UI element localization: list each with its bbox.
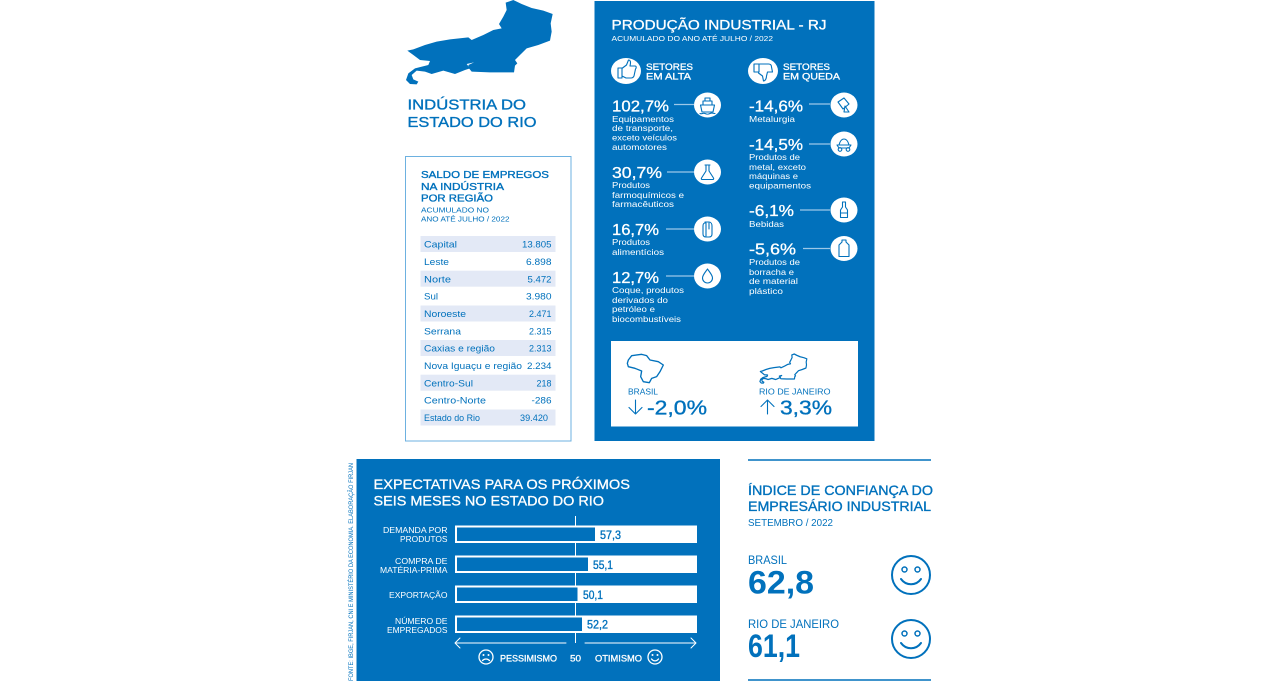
main title: ESTADO DO RIO bbox=[408, 114, 536, 131]
Brazil index: BRASIL bbox=[748, 555, 788, 567]
item: beverages bbox=[749, 198, 858, 229]
bar: raw material: COMPRA DE bbox=[395, 556, 448, 566]
panel: industrial production RJ bbox=[594, 1, 874, 441]
Rio figure: RIO DE JANEIRO bbox=[759, 386, 831, 396]
bar: exports: 50,1 bbox=[583, 588, 603, 602]
panel heading bbox=[421, 169, 549, 224]
item: pharmaceuticals: farmacêuticos bbox=[612, 199, 675, 209]
Rio index: 61,1 bbox=[748, 628, 800, 664]
table: balance by region: Serrana bbox=[424, 326, 462, 338]
item: transport equipment: automotores bbox=[612, 142, 668, 152]
panel heading: SALDO DE EMPREGOS bbox=[421, 169, 549, 181]
Rio index bbox=[748, 619, 839, 664]
item: rubber and plastic: plástico bbox=[749, 286, 783, 296]
table: balance by region: 13.805 bbox=[522, 240, 552, 250]
item: coke and petroleum: 12,7% bbox=[612, 270, 659, 287]
panel heading: SEIS MESES NO ESTADO DO RIO bbox=[374, 492, 604, 508]
item: pharmaceuticals: farmoquímicos e bbox=[612, 190, 684, 200]
label: sectors down: SETORES bbox=[783, 62, 830, 72]
panel heading: ACUMULADO NO bbox=[421, 206, 489, 214]
item: food products bbox=[612, 216, 721, 257]
Rio figure bbox=[759, 386, 832, 420]
label: sectors up: SETORES bbox=[646, 62, 693, 72]
main title bbox=[408, 96, 536, 131]
Rio index: RIO DE JANEIRO bbox=[748, 619, 839, 631]
table: balance by region: Leste bbox=[424, 257, 449, 268]
icon: smiley Brazil bbox=[892, 556, 930, 594]
heading: SETEMBRO / 2022 bbox=[748, 517, 833, 529]
icon: thumbs up bbox=[611, 58, 641, 84]
item: rubber and plastic: de material bbox=[749, 276, 798, 286]
item: coke and petroleum: derivados do bbox=[612, 295, 668, 305]
table: balance by region: Nova Iguaçu e região bbox=[424, 361, 522, 372]
panel: employment balance by region bbox=[406, 156, 571, 441]
table: balance by region: Capital bbox=[424, 240, 457, 250]
panel heading: EXPECTATIVAS PARA OS PRÓXIMOS bbox=[374, 476, 630, 492]
label: sectors up: EM ALTA bbox=[646, 72, 692, 82]
scale labels: 50 bbox=[570, 654, 581, 664]
table: balance by region: Centro-Sul bbox=[424, 378, 473, 390]
label: sectors down: EM QUEDA bbox=[783, 72, 841, 82]
item: metallurgy: -14,6% bbox=[749, 98, 803, 116]
table: balance by region: Estado do Rio bbox=[424, 413, 480, 424]
bar: employees bbox=[387, 616, 697, 635]
item: transport equipment bbox=[612, 92, 721, 152]
bar: raw material: 55,1 bbox=[593, 558, 613, 572]
icon: Brazil outline bbox=[627, 354, 663, 383]
panel heading: ACUMULADO DO ANO ATÉ JULHO / 2022 bbox=[612, 34, 773, 43]
heading: ÍNDICE DE CONFIANÇA DO bbox=[748, 482, 933, 498]
arrow: optimism bbox=[585, 638, 696, 648]
bar chart: expectations bbox=[380, 516, 697, 643]
item: transport equipment: exceto veículos bbox=[612, 132, 678, 142]
Brazil index: 62,8 bbox=[748, 564, 814, 600]
heading: EMPRESÁRIO INDUSTRIAL bbox=[748, 498, 931, 514]
bar: raw material bbox=[380, 556, 697, 575]
icon: Rio outline bbox=[760, 354, 807, 383]
item: food products: alimentícios bbox=[612, 247, 665, 257]
panel: business confidence index bbox=[748, 460, 933, 680]
bar: employees: NÚMERO DE bbox=[395, 616, 448, 626]
item: transport equipment: 102,7% bbox=[612, 99, 669, 116]
table: balance by region: 2.315 bbox=[529, 326, 552, 338]
bar: employees: EMPREGADOS bbox=[387, 625, 448, 635]
panel heading: ANO ATÉ JULHO / 2022 bbox=[421, 214, 510, 224]
bar: exports bbox=[389, 586, 697, 603]
label: sectors down bbox=[783, 62, 841, 82]
item: transport equipment: Equipamentos bbox=[612, 114, 675, 124]
item: metal products: Produtos de bbox=[749, 152, 800, 162]
table: balance by region: Noroeste bbox=[424, 309, 466, 320]
table: balance by region: 218 bbox=[536, 378, 552, 390]
item: coke and petroleum bbox=[612, 264, 721, 324]
item: food products: Produtos bbox=[612, 237, 651, 247]
table: balance by region: 6.898 bbox=[526, 257, 552, 268]
item: transport equipment: de transporte, bbox=[612, 123, 673, 133]
item: pharmaceuticals: Produtos bbox=[612, 180, 651, 190]
table: balance by region bbox=[420, 236, 556, 426]
item: rubber and plastic: -5,6% bbox=[749, 242, 796, 258]
panel heading bbox=[612, 18, 826, 43]
item: beverages: -6,1% bbox=[749, 203, 794, 220]
label: sectors up bbox=[646, 62, 693, 82]
bar: demand bbox=[383, 525, 697, 544]
table: balance by region: Caxias e região bbox=[424, 344, 495, 354]
item: pharmaceuticals bbox=[612, 160, 721, 209]
item: rubber and plastic bbox=[749, 236, 858, 296]
bar: employees: 52,2 bbox=[587, 618, 608, 632]
heading bbox=[748, 482, 933, 529]
table: balance by region: 5.472 bbox=[528, 274, 552, 286]
table: balance by region: 39.420 bbox=[520, 413, 548, 424]
scale labels bbox=[500, 654, 642, 664]
item: food products: 16,7% bbox=[612, 222, 659, 239]
item: rubber and plastic: borracha e bbox=[749, 267, 794, 277]
scale labels: OTIMISMO bbox=[595, 654, 642, 664]
item: coke and petroleum: petróleo e bbox=[612, 304, 655, 314]
table: balance by region: Norte bbox=[424, 274, 451, 286]
Rio figure: 3,3% bbox=[780, 396, 832, 420]
panel heading bbox=[374, 476, 630, 508]
item: rubber and plastic: Produtos de bbox=[749, 257, 800, 267]
table: balance by region: 2.313 bbox=[529, 344, 552, 354]
table: balance by region: 2.234 bbox=[527, 361, 552, 372]
table: balance by region: 3.980 bbox=[526, 292, 552, 302]
item: metal products: -14,5% bbox=[749, 137, 803, 154]
panel heading: PRODUÇÃO INDUSTRIAL - RJ bbox=[612, 18, 826, 32]
icon: thumbs down bbox=[748, 58, 778, 84]
item: metal products: máquinas e bbox=[749, 171, 798, 181]
arrow: pessimism bbox=[455, 638, 566, 648]
panel heading: POR REGIÃO bbox=[421, 192, 493, 204]
icon: sad face bbox=[479, 650, 493, 664]
item: coke and petroleum: Coque, produtos bbox=[612, 285, 685, 295]
item: metallurgy: Metalurgia bbox=[749, 114, 795, 124]
bar: demand: 57,3 bbox=[600, 528, 621, 542]
item: metal products: metal, exceto bbox=[749, 162, 806, 172]
icon: smiley Rio bbox=[892, 620, 930, 658]
icon: happy face bbox=[648, 650, 662, 664]
table: balance by region: -286 bbox=[532, 396, 552, 406]
bar: demand: PRODUTOS bbox=[400, 534, 448, 544]
map: state of Rio de Janeiro bbox=[406, 0, 553, 84]
Brazil figure: BRASIL bbox=[628, 386, 658, 396]
item: beverages: Bebidas bbox=[749, 219, 785, 229]
panel heading: NA INDÚSTRIA bbox=[421, 180, 504, 193]
table: balance by region: Centro-Norte bbox=[424, 396, 486, 406]
Brazil figure: -2,0% bbox=[647, 396, 707, 420]
panel: expectations for next six months bbox=[356, 459, 720, 681]
Brazil figure bbox=[628, 386, 707, 420]
item: metal products: equipamentos bbox=[749, 180, 812, 190]
bar: raw material: MATÉRIA-PRIMA bbox=[380, 565, 448, 575]
item: coke and petroleum: biocombustíveis bbox=[612, 314, 682, 324]
scale labels: PESSIMISMO bbox=[500, 654, 557, 664]
bar: exports: EXPORTAÇÃO bbox=[389, 590, 448, 600]
main title: INDÚSTRIA DO bbox=[408, 96, 526, 114]
item: metal products bbox=[749, 132, 858, 190]
table: balance by region: Sul bbox=[424, 292, 438, 302]
table: balance by region: 2.471 bbox=[529, 309, 552, 320]
source note: FONTE: IBGE, FIRJAN, CNI E MINISTÉRIO DA ECONOMIA. ELABORAÇÃO FIRJAN bbox=[346, 463, 355, 681]
bar: demand: DEMANDA POR bbox=[383, 525, 448, 535]
item: pharmaceuticals: 30,7% bbox=[612, 165, 662, 182]
callout: Brazil vs Rio totals bbox=[611, 341, 858, 426]
item: metallurgy bbox=[749, 92, 858, 124]
